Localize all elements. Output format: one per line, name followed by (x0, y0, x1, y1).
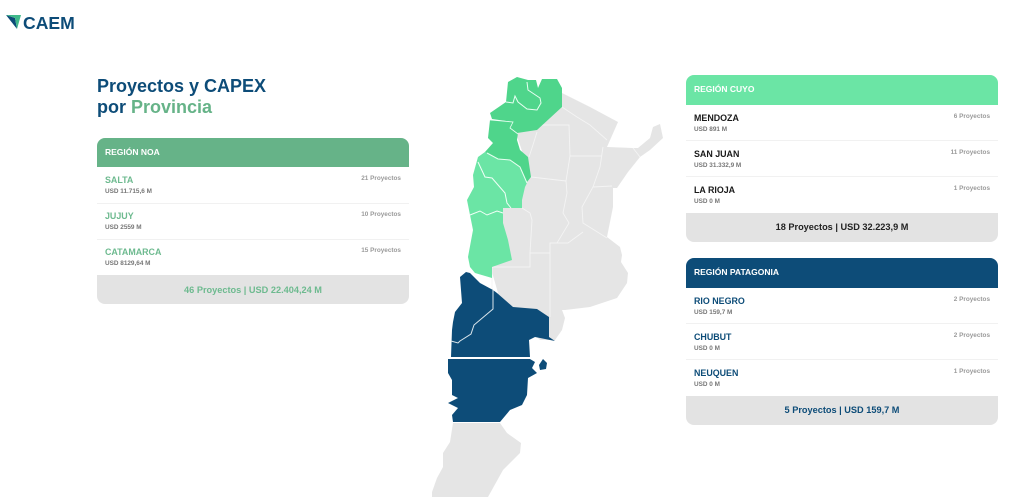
panel footer: 5 Proyectos | USD 159,7 M (785, 405, 899, 415)
row: Chubut: USD 0 M (694, 345, 720, 352)
region: Patagonia (448, 272, 555, 422)
row: Neuquen: USD 0 M (694, 381, 720, 388)
row: Rio Negro: USD 159,7 M (694, 309, 732, 316)
title: por Provincia (97, 97, 212, 117)
panel footer: 18 Proyectos | USD 32.223,9 M (776, 222, 908, 232)
row: Salta (105, 175, 401, 195)
row: Catamarca: USD 8129,64 M (105, 260, 150, 267)
row: Rio Negro: RIO NEGRO (694, 296, 745, 306)
row: Neuquen: 1 Proyectos (954, 368, 990, 375)
row: Catamarca (105, 247, 401, 267)
logo wordmark: CAEM (23, 13, 75, 33)
row: Mendoza: USD 891 M (694, 126, 727, 133)
Neuquen and Rio Negro (451, 272, 555, 357)
Catamarca (485, 120, 531, 182)
panel header: REGIÓN NOA (105, 147, 160, 157)
row: Mendoza: 6 Proyectos (954, 113, 990, 120)
row: Chubut (694, 332, 990, 352)
panel header: REGIÓN CUYO (694, 84, 754, 94)
row: San Juan: SAN JUAN (694, 149, 739, 159)
row: Neuquen (694, 368, 990, 388)
Neuquen border (451, 290, 493, 343)
row: Rio Negro (694, 296, 990, 316)
row: Catamarca: CATAMARCA (105, 247, 161, 257)
panel header (686, 75, 998, 105)
row: Rio Negro: 2 Proyectos (954, 296, 990, 303)
logo: CAEM (6, 13, 75, 33)
panel header (686, 258, 998, 288)
icon: logo triangle (6, 15, 21, 29)
row: Salta: 21 Proyectos (361, 175, 401, 182)
panel header: REGIÓN PATAGONIA (694, 267, 779, 277)
gray provinces (432, 93, 663, 497)
Chubut and Santa Cruz (448, 359, 537, 422)
title: Proyectos y CAPEX (97, 76, 266, 96)
Catamarca and La Rioja border (487, 153, 527, 183)
row: Neuquen: NEUQUEN (694, 368, 738, 378)
row: San Juan: 11 Proyectos (951, 149, 990, 156)
row: Jujuy: 10 Proyectos (361, 211, 401, 218)
row: Jujuy (105, 211, 401, 231)
panel footer (686, 213, 998, 242)
panel footer (97, 275, 409, 304)
row: Mendoza: MENDOZA (694, 113, 739, 123)
row: Jujuy: USD 2559 M (105, 224, 142, 231)
row: Salta: USD 11.715,6 M (105, 188, 152, 195)
San Juan and La Rioja borders (478, 162, 511, 208)
panel header (97, 138, 409, 167)
panel: Región NOA (97, 138, 409, 304)
row: La Rioja: LA RIOJA (694, 185, 735, 195)
Salta and Catamarca border (490, 120, 518, 134)
region: Cuyo (467, 152, 527, 278)
row: Chubut: 2 Proyectos (954, 332, 990, 339)
island (539, 359, 547, 370)
title (97, 76, 266, 117)
row: La Rioja (694, 185, 990, 205)
row: Catamarca: 15 Proyectos (361, 247, 401, 254)
Salta and Jujuy (490, 77, 562, 133)
panel footer (686, 396, 998, 425)
north and centre silhouette (490, 93, 663, 340)
row: Mendoza (694, 113, 990, 133)
row: Salta: SALTA (105, 175, 133, 185)
row: San Juan (694, 149, 990, 169)
panel: Región Patagonia (686, 258, 998, 425)
row: Jujuy: JUJUY (105, 211, 134, 221)
south silhouette (432, 423, 521, 497)
panel footer: 46 Proyectos | USD 22.404,24 M (184, 285, 322, 295)
row: La Rioja: USD 0 M (694, 198, 720, 205)
row: San Juan: USD 31.332,9 M (694, 162, 741, 169)
Jujuy border (506, 82, 541, 110)
row: Chubut: CHUBUT (694, 332, 731, 342)
map of Argentina (432, 77, 663, 497)
region: NOA (485, 77, 562, 183)
panel: Región Cuyo (686, 75, 998, 242)
row: La Rioja: 1 Proyectos (954, 185, 990, 192)
province borders (492, 107, 640, 317)
